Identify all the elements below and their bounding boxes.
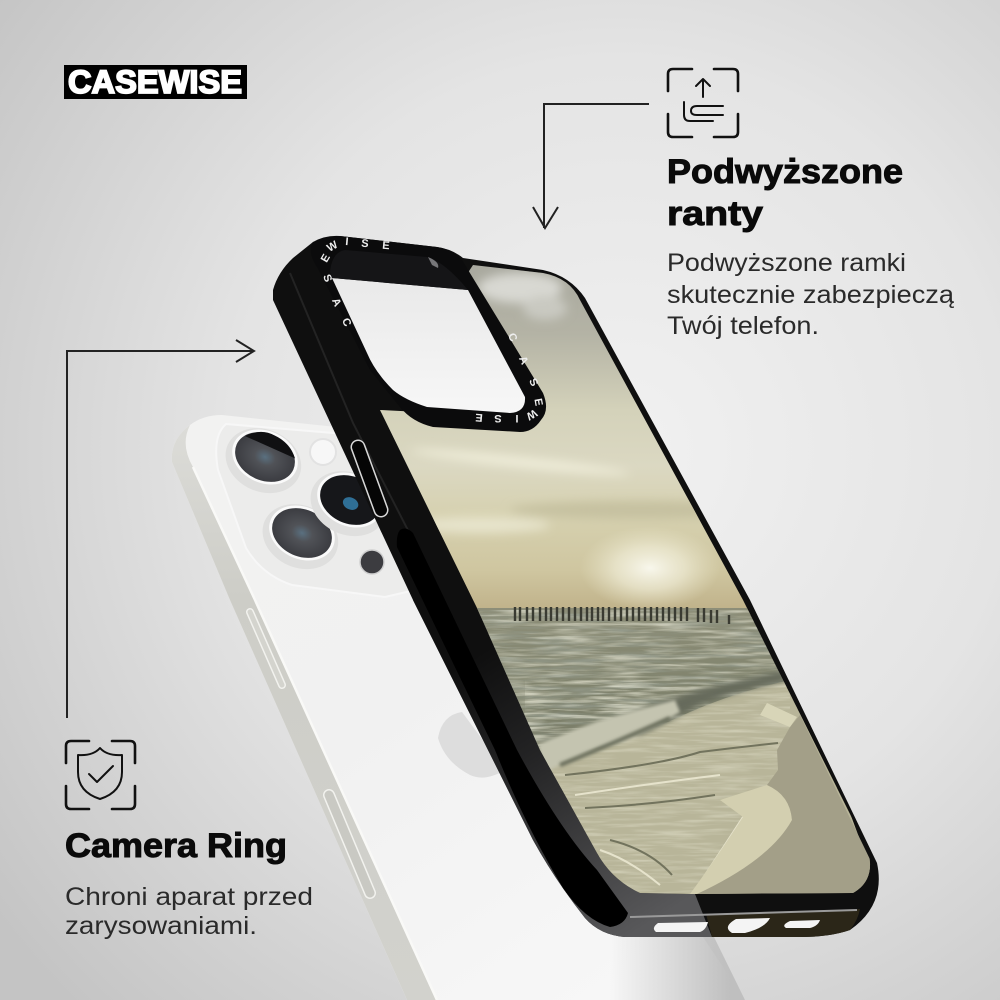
- side buttons: [250, 612, 370, 893]
- bottom seam: [630, 910, 857, 917]
- heading: raised edges: Podwyższone: [667, 153, 903, 191]
- ring lettering: I: [345, 236, 349, 248]
- text: camera ring description: [65, 883, 313, 940]
- beach photo: [370, 255, 890, 894]
- ring lettering: S: [494, 412, 502, 424]
- translucent lower side rim: [413, 600, 712, 937]
- charging and speaker openings: [654, 918, 820, 933]
- sea: [477, 608, 837, 788]
- side highlight: [290, 273, 413, 540]
- ring lettering: E: [319, 252, 333, 265]
- text: raised edges description: Podwyższone ramki: [667, 249, 906, 277]
- icon: shield: [66, 741, 135, 809]
- ring lettering: E: [531, 398, 545, 407]
- side button: [358, 447, 381, 510]
- foam texture: [525, 680, 790, 894]
- camera plateau: [216, 424, 415, 597]
- text: camera ring description: zarysowaniami.: [65, 912, 257, 940]
- ring lettering: W: [325, 239, 341, 255]
- lens 3: [300, 459, 397, 548]
- flash: [310, 439, 336, 465]
- shore ripples: [565, 743, 778, 875]
- heading: raised edges: [667, 153, 903, 233]
- sky: [380, 265, 750, 615]
- wet sand: [690, 785, 792, 894]
- sea ripples dark: [480, 610, 806, 746]
- phone side edge: [172, 425, 437, 1000]
- shadow under case: [600, 930, 745, 1000]
- text: raised edges description: [667, 249, 954, 340]
- ring frame: [311, 236, 546, 432]
- side slot: [397, 529, 628, 927]
- ring opening: [332, 278, 525, 413]
- arrow: left to camera ring: [67, 340, 254, 718]
- text: raised edges description: skutecznie zabezpieczą: [667, 281, 954, 309]
- logo: CASEWISE: [68, 64, 242, 100]
- heading: raised edges: ranty: [667, 195, 763, 233]
- apple logo: [438, 712, 505, 778]
- sensor: [360, 550, 384, 574]
- ring lettering: S: [320, 273, 334, 284]
- icon: raised edges: [668, 69, 738, 137]
- dark wave band: [610, 672, 790, 735]
- black case: [273, 236, 879, 937]
- ring lettering: E: [475, 411, 483, 423]
- upper beach foam: [760, 703, 797, 727]
- pier: [515, 607, 729, 624]
- ring lettering: E: [382, 240, 390, 252]
- ring lettering: S: [526, 377, 540, 388]
- lens 2: [252, 492, 349, 581]
- ring lettering: I: [515, 412, 519, 424]
- ring opening upper wall: [330, 250, 468, 290]
- ring lettering: W: [523, 406, 539, 422]
- case shell: [273, 236, 879, 937]
- white phone: [172, 415, 745, 1000]
- phone body: [172, 415, 745, 1000]
- ring lettering: S: [361, 238, 369, 250]
- bottom face: [706, 909, 860, 937]
- heading: camera ring: Camera Ring: [65, 827, 287, 865]
- lens 1: [215, 416, 312, 505]
- ring lettering: [319, 236, 545, 424]
- shore base: [548, 682, 870, 894]
- ring lettering: C: [339, 316, 353, 329]
- dry sand: [697, 715, 880, 894]
- sea ripples light: [478, 610, 812, 746]
- sun: [590, 533, 710, 606]
- ring lettering: A: [329, 296, 343, 309]
- wave crest: [538, 700, 680, 772]
- text: raised edges description: Twój telefon.: [667, 312, 819, 340]
- arrow: top to case edge: [533, 104, 649, 228]
- clouds: [422, 268, 700, 536]
- text: camera ring description: Chroni aparat przed: [65, 883, 313, 911]
- camera ring: [311, 236, 546, 432]
- ring lettering: C: [505, 331, 519, 344]
- ring lettering: A: [516, 354, 530, 367]
